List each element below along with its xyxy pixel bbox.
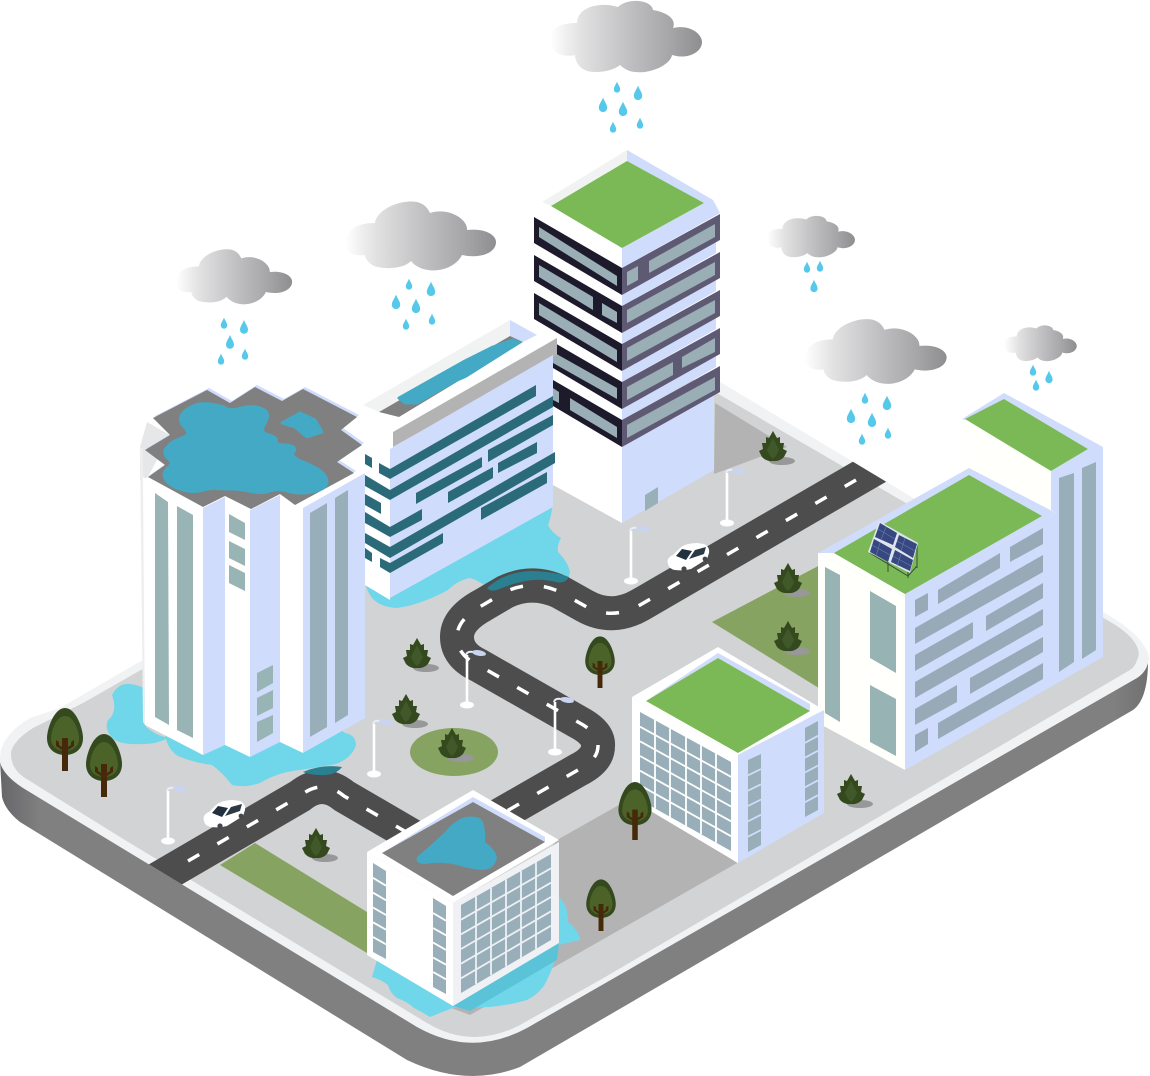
flooded roof <box>145 385 364 509</box>
shrubs <box>302 431 873 862</box>
tower floor 3 <box>534 290 720 371</box>
tower floor 4 <box>553 328 720 409</box>
left face windows <box>825 567 896 756</box>
platform base <box>0 353 1149 1076</box>
building: solar-roof office <box>818 393 1103 770</box>
right window grid <box>461 854 551 993</box>
left window grid <box>640 712 731 851</box>
roof water <box>399 340 521 403</box>
tower floor 5 <box>553 366 720 447</box>
floor shadows <box>430 403 787 1015</box>
building: green-roof grid block <box>632 647 824 863</box>
tower floor 2 <box>534 252 720 333</box>
green lawn strips <box>220 564 822 953</box>
left window strips <box>373 863 446 994</box>
cars <box>204 543 709 829</box>
water over road <box>303 571 569 775</box>
tower floor slabs <box>538 242 716 420</box>
tower floor 1 <box>534 214 720 295</box>
building: teal-stripe block <box>363 320 557 600</box>
back tower windows <box>1059 462 1096 672</box>
building: front block with pond roof <box>367 790 559 1006</box>
tower windows <box>155 490 348 742</box>
teal window bands <box>365 385 555 573</box>
right window strips <box>748 721 818 852</box>
right face windows <box>915 528 1043 752</box>
clouds <box>176 1 1077 384</box>
road network <box>130 454 900 895</box>
water pool at base of centre-left building <box>365 500 570 608</box>
solar panels <box>868 521 918 578</box>
trees <box>47 636 652 931</box>
rain drops <box>218 82 1053 445</box>
water pools around left building <box>107 684 356 786</box>
building: tall flooded-roof tower <box>140 385 365 757</box>
water pool at front building <box>372 897 580 1017</box>
building: dark banded tower <box>534 150 720 523</box>
street lamps <box>161 467 746 844</box>
